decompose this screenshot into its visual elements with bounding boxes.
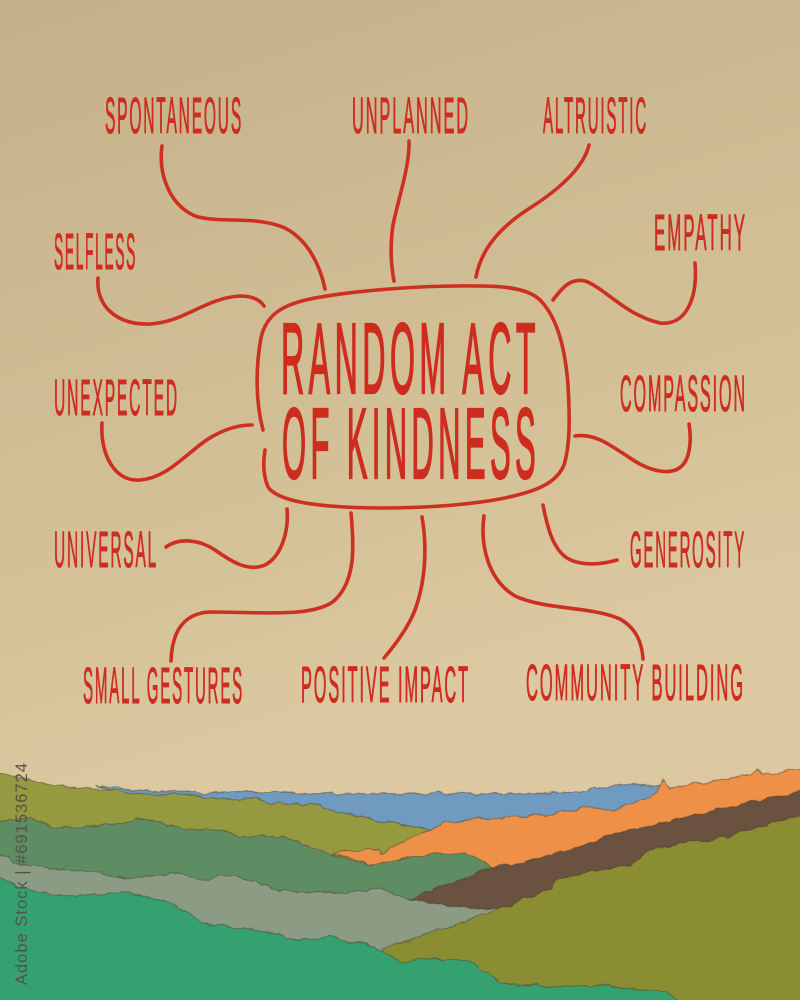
branch: unexpected	[54, 369, 252, 480]
text: SPONTANEOUS	[105, 87, 243, 144]
layer: bottom green paper	[0, 872, 695, 1000]
branch: universal: UNIVERSAL	[54, 521, 158, 578]
branch: compassion	[575, 365, 747, 472]
layer: orange paper	[332, 766, 800, 868]
layer: brown paper	[405, 770, 800, 945]
branch: universal	[54, 509, 287, 578]
layer: dark green paper	[0, 817, 490, 910]
layer: blue paper	[95, 784, 660, 860]
watermark: Adobe Stock | #691536724	[13, 763, 31, 985]
branch: empathy	[553, 204, 747, 323]
text: UNPLANNED	[352, 87, 470, 144]
torn paper landscape	[0, 766, 800, 1000]
branch: positive impact	[301, 517, 470, 713]
branch: selfless: SELFLESS	[54, 223, 137, 280]
title	[281, 303, 540, 500]
layer: left olive paper	[0, 771, 460, 880]
branch: selfless	[54, 223, 264, 324]
layer: right olive paper	[383, 813, 800, 1000]
branch: spontaneous	[105, 87, 325, 289]
branch: small gestures	[83, 513, 353, 714]
text: SMALL GESTURES	[83, 657, 244, 714]
branch: generosity	[543, 505, 746, 578]
layer: grey-green paper	[0, 852, 500, 960]
text: UNEXPECTED	[54, 369, 179, 426]
central rounded box	[257, 286, 569, 508]
branch: community building	[483, 516, 745, 711]
branch: altruistic	[476, 87, 648, 277]
branch: unplanned	[352, 87, 470, 281]
